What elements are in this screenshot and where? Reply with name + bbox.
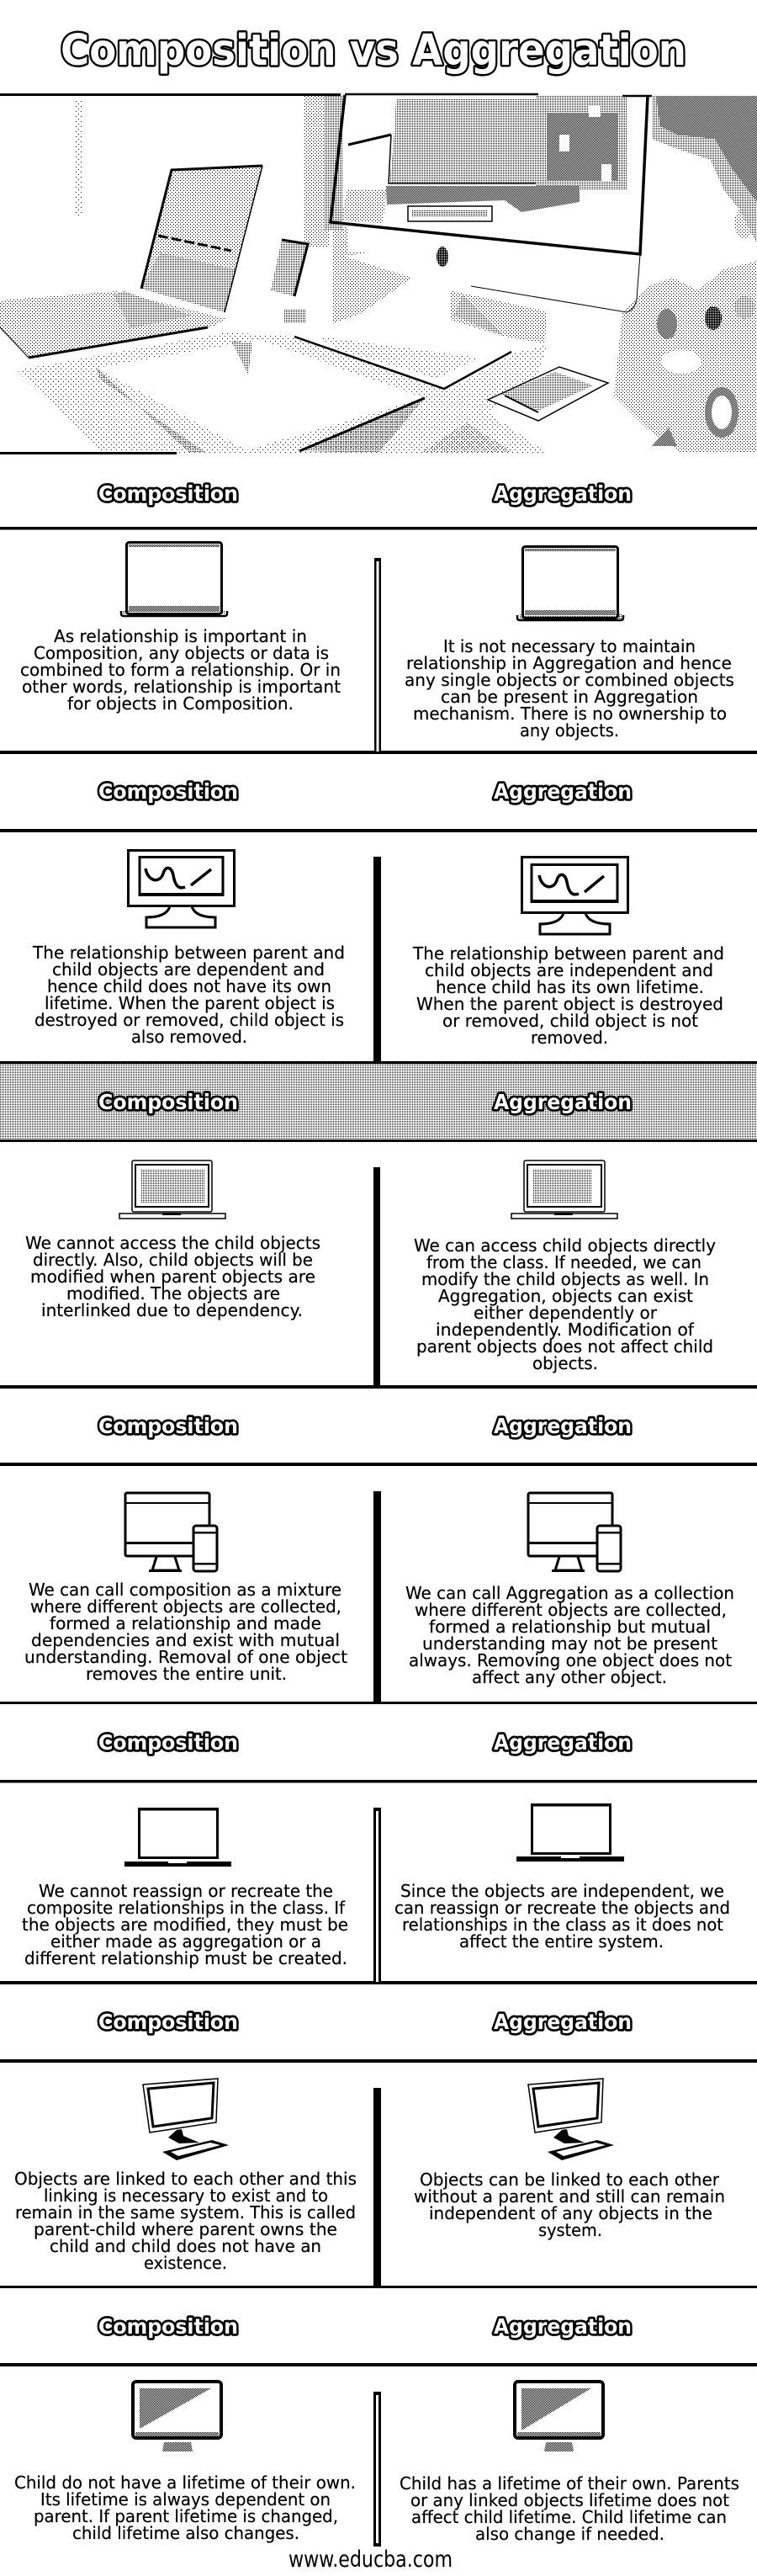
text: aggregation relationship: relationship in Aggregation and hence bbox=[406, 653, 732, 673]
text: aggregation access: modify the child objects as well. In bbox=[421, 1269, 709, 1289]
icon: laptop right bbox=[516, 1803, 624, 1862]
heading: Composition: Composition bbox=[98, 1414, 238, 1438]
title: Composition vs Aggregation bbox=[61, 26, 686, 76]
text: aggregation access: objects. bbox=[532, 1353, 598, 1373]
text: aggregation relationship: any objects. bbox=[520, 720, 619, 741]
text: aggregation independency: child objects are independent and bbox=[425, 960, 713, 980]
heading: Composition: Composition bbox=[98, 2010, 238, 2034]
text: aggregation lifetime: also change if needed. bbox=[475, 2524, 664, 2544]
icon: monitor right bbox=[521, 857, 627, 934]
panel: row 6 bbox=[0, 2010, 757, 2288]
heading: Aggregation: Aggregation bbox=[494, 1730, 632, 1755]
divider bbox=[373, 2392, 381, 2547]
text: aggregation relationship: mechanism. There is no ownership to bbox=[413, 704, 727, 724]
tablet on stand bbox=[271, 240, 308, 323]
text: composition dependency: destroyed or removed, child object is bbox=[34, 1010, 344, 1030]
panel: row 2 bbox=[0, 779, 757, 1064]
text: aggregation reassign: relationships in the class as it does not bbox=[402, 1915, 723, 1935]
icon: laptop with noisy screen left bbox=[119, 1161, 225, 1219]
text: aggregation collection: where different objects are collected, bbox=[415, 1600, 727, 1620]
text: composition relationship: combined to form a relationship. Or in bbox=[20, 660, 341, 680]
text: aggregation access: We can access child objects directly bbox=[414, 1235, 716, 1256]
text: aggregation lifetime: affect child lifetime. Child lifetime can bbox=[411, 2507, 727, 2527]
text: composition dependency: also removed. bbox=[131, 1027, 247, 1047]
text: aggregation linking: Objects can be linked to each other bbox=[420, 2170, 720, 2190]
text: composition access: modified when parent objects are bbox=[30, 1267, 315, 1287]
text: composition dependency bbox=[32, 943, 345, 1047]
text: composition linking: remain in the same system. This is called bbox=[15, 2202, 356, 2223]
text: composition linking bbox=[14, 2169, 357, 2273]
text: composition reassign: composite relationships in the class. If bbox=[27, 1898, 346, 1918]
divider bbox=[374, 558, 381, 752]
text: aggregation independency: or removed, child object is not bbox=[442, 1011, 698, 1031]
text: composition lifetime bbox=[14, 2472, 356, 2543]
plant and mottled background at lower right bbox=[614, 208, 757, 453]
gray header band bbox=[0, 1064, 757, 1139]
text: composition relationship: Composition, any objects or data is bbox=[34, 643, 329, 663]
text: composition lifetime: child lifetime also changes. bbox=[72, 2523, 299, 2543]
text: aggregation reassign: can reassign or recreate the objects and bbox=[394, 1898, 730, 1918]
text: composition relationship: As relationship is important in bbox=[54, 626, 307, 646]
icon: laptop left bbox=[121, 542, 227, 616]
heading: Composition: Composition bbox=[98, 1730, 238, 1755]
panel: row 4 bbox=[0, 1414, 757, 1704]
text: aggregation reassign bbox=[394, 1881, 730, 1952]
desk surface bbox=[17, 332, 547, 453]
text: composition lifetime: Its lifetime is always dependent on bbox=[40, 2489, 331, 2510]
panel: row 7 bbox=[0, 2314, 757, 2547]
icon: monitor and phone left bbox=[125, 1493, 217, 1572]
text: composition linking: Objects are linked to each other and this bbox=[14, 2169, 357, 2189]
panel: row 5 bbox=[0, 1730, 757, 1984]
icon: desktop computer left bbox=[143, 2079, 229, 2160]
text: composition mixture bbox=[24, 1580, 347, 1684]
text: composition dependency: hence child does not have its own bbox=[47, 976, 331, 996]
text: aggregation collection: affect any other object. bbox=[472, 1667, 667, 1687]
laptop bbox=[0, 166, 262, 358]
text: composition reassign: different relationship must be created. bbox=[24, 1948, 347, 1968]
text: aggregation linking: independent of any objects in the bbox=[429, 2203, 712, 2223]
heading: Composition: Composition bbox=[98, 481, 238, 506]
text: composition lifetime: Child do not have a lifetime of their own. bbox=[14, 2472, 356, 2493]
text: composition mixture: dependencies and exist with mutual bbox=[31, 1630, 340, 1650]
text: composition reassign bbox=[22, 1881, 348, 1968]
text: composition access: We cannot access the child objects bbox=[25, 1233, 320, 1253]
text: aggregation linking: without a parent and still can remain bbox=[414, 2186, 725, 2207]
text: aggregation lifetime: or any linked objects lifetime does not bbox=[410, 2490, 729, 2510]
text: composition reassign: either made as aggregation or a bbox=[50, 1931, 321, 1952]
text: composition linking: child and child does not have an bbox=[50, 2236, 321, 2256]
text: aggregation relationship: can be present in Aggregation bbox=[441, 687, 698, 707]
icon: monitor and phone right bbox=[528, 1493, 621, 1572]
text: composition reassign: We cannot reassign or recreate the bbox=[39, 1881, 333, 1901]
text: composition mixture: We can call composition as a mixture bbox=[29, 1580, 341, 1600]
desktop monitor bbox=[331, 94, 652, 312]
paper on desk bbox=[97, 340, 425, 450]
icon: desktop computer right bbox=[528, 2079, 614, 2160]
text: composition relationship bbox=[20, 626, 341, 714]
text: composition reassign: the objects are modified, they must be bbox=[22, 1915, 348, 1935]
text: composition linking: linking is necessary to exist and to bbox=[44, 2186, 328, 2206]
heading: Composition: Composition bbox=[98, 2314, 238, 2339]
heading: Aggregation: Aggregation bbox=[494, 1414, 632, 1438]
text: aggregation independency: hence child has its own lifetime. bbox=[436, 977, 704, 997]
text: composition dependency: lifetime. When the parent object is bbox=[45, 993, 335, 1013]
text: aggregation relationship bbox=[405, 636, 734, 741]
smartphone on desk bbox=[488, 367, 608, 421]
text: aggregation lifetime: Child has a lifetime of their own. Parents bbox=[400, 2473, 739, 2494]
text: composition access bbox=[25, 1233, 320, 1320]
text: composition relationship: for objects in Composition. bbox=[67, 693, 294, 714]
text: composition access: interlinked due to dependency. bbox=[41, 1300, 303, 1320]
text: aggregation access: independently. Modification of bbox=[436, 1320, 695, 1340]
heading: Aggregation: Aggregation bbox=[494, 1090, 632, 1114]
heading: Aggregation: Aggregation bbox=[494, 2010, 632, 2034]
text: aggregation independency: removed. bbox=[531, 1028, 608, 1048]
panel: row 1 bbox=[0, 481, 757, 754]
text: aggregation collection bbox=[405, 1583, 734, 1687]
text: composition access: modified. The objects are bbox=[66, 1283, 280, 1304]
text: aggregation linking bbox=[414, 2170, 725, 2240]
text: composition mixture: removes the entire unit. bbox=[86, 1664, 287, 1684]
divider bbox=[373, 1491, 381, 1703]
keyboard bbox=[294, 327, 511, 389]
text: aggregation lifetime bbox=[400, 2473, 739, 2544]
text: composition dependency: The relationship between parent and bbox=[32, 943, 345, 963]
panel: row 3 with gray header band bbox=[0, 1064, 757, 1389]
text: composition mixture: understanding. Removal of one object bbox=[24, 1647, 347, 1667]
heading: Aggregation: Aggregation bbox=[494, 2314, 632, 2339]
icon: flat monitor right bbox=[515, 2382, 603, 2451]
apple logo bbox=[437, 247, 448, 267]
divider bbox=[373, 1808, 381, 1982]
text: composition access: directly. Also, child objects will be bbox=[33, 1250, 313, 1270]
text: composition dependency: child objects are dependent and bbox=[52, 959, 325, 980]
text: composition linking: existence. bbox=[144, 2253, 227, 2273]
text: aggregation independency: When the parent object is destroyed bbox=[416, 994, 723, 1014]
text: aggregation collection: understanding may not be present bbox=[422, 1633, 717, 1654]
icon: laptop left bbox=[124, 1808, 231, 1867]
text: aggregation independency: The relationship between parent and bbox=[412, 943, 724, 964]
text: composition relationship: other words, relationship is important bbox=[22, 677, 341, 697]
text: aggregation access: Aggregation, objects can exist bbox=[438, 1286, 693, 1306]
text: aggregation linking: system. bbox=[538, 2220, 602, 2240]
text: aggregation access: parent objects does not affect child bbox=[416, 1336, 713, 1357]
background wall on right bbox=[652, 96, 757, 244]
text: aggregation reassign: affect the entire system. bbox=[459, 1931, 664, 1952]
text: composition linking: parent-child where parent owns the bbox=[34, 2219, 337, 2239]
heading: Composition: Composition bbox=[98, 1090, 238, 1114]
text: composition lifetime: parent. If parent lifetime is changed, bbox=[34, 2506, 338, 2526]
text: aggregation access: from the class. If needed, we can bbox=[426, 1252, 701, 1272]
text: composition mixture: formed a relationship and made bbox=[50, 1613, 321, 1633]
icon: monitor left bbox=[128, 850, 234, 927]
divider bbox=[373, 2088, 381, 2286]
text: aggregation collection: We can call Aggregation as a collection bbox=[405, 1583, 734, 1603]
photo: desk with laptop and desktop computer bbox=[0, 93, 757, 454]
text: aggregation access bbox=[414, 1235, 716, 1373]
text: aggregation access: either dependently or bbox=[474, 1303, 658, 1323]
icon: laptop right bbox=[517, 547, 623, 620]
text: aggregation relationship: It is not necessary to maintain bbox=[443, 636, 696, 656]
text: aggregation collection: formed a relationship but mutual bbox=[429, 1617, 711, 1637]
text: aggregation collection: always. Removing one object does not bbox=[409, 1650, 732, 1670]
heading: Composition: Composition bbox=[98, 779, 238, 804]
text: composition mixture: where different objects are collected, bbox=[30, 1596, 341, 1617]
divider bbox=[373, 857, 381, 1062]
text: aggregation relationship: any single objects or combined objects bbox=[405, 670, 734, 690]
text: aggregation reassign: Since the objects are independent, we bbox=[400, 1881, 724, 1901]
heading: Aggregation: Aggregation bbox=[494, 779, 632, 804]
icon: flat monitor left bbox=[133, 2382, 221, 2451]
divider bbox=[373, 1167, 380, 1387]
footer url: www.educba.com bbox=[289, 2547, 453, 2573]
icon: laptop with noisy screen right bbox=[511, 1161, 617, 1219]
text: aggregation independency bbox=[412, 943, 724, 1048]
heading: Aggregation: Aggregation bbox=[494, 481, 632, 506]
